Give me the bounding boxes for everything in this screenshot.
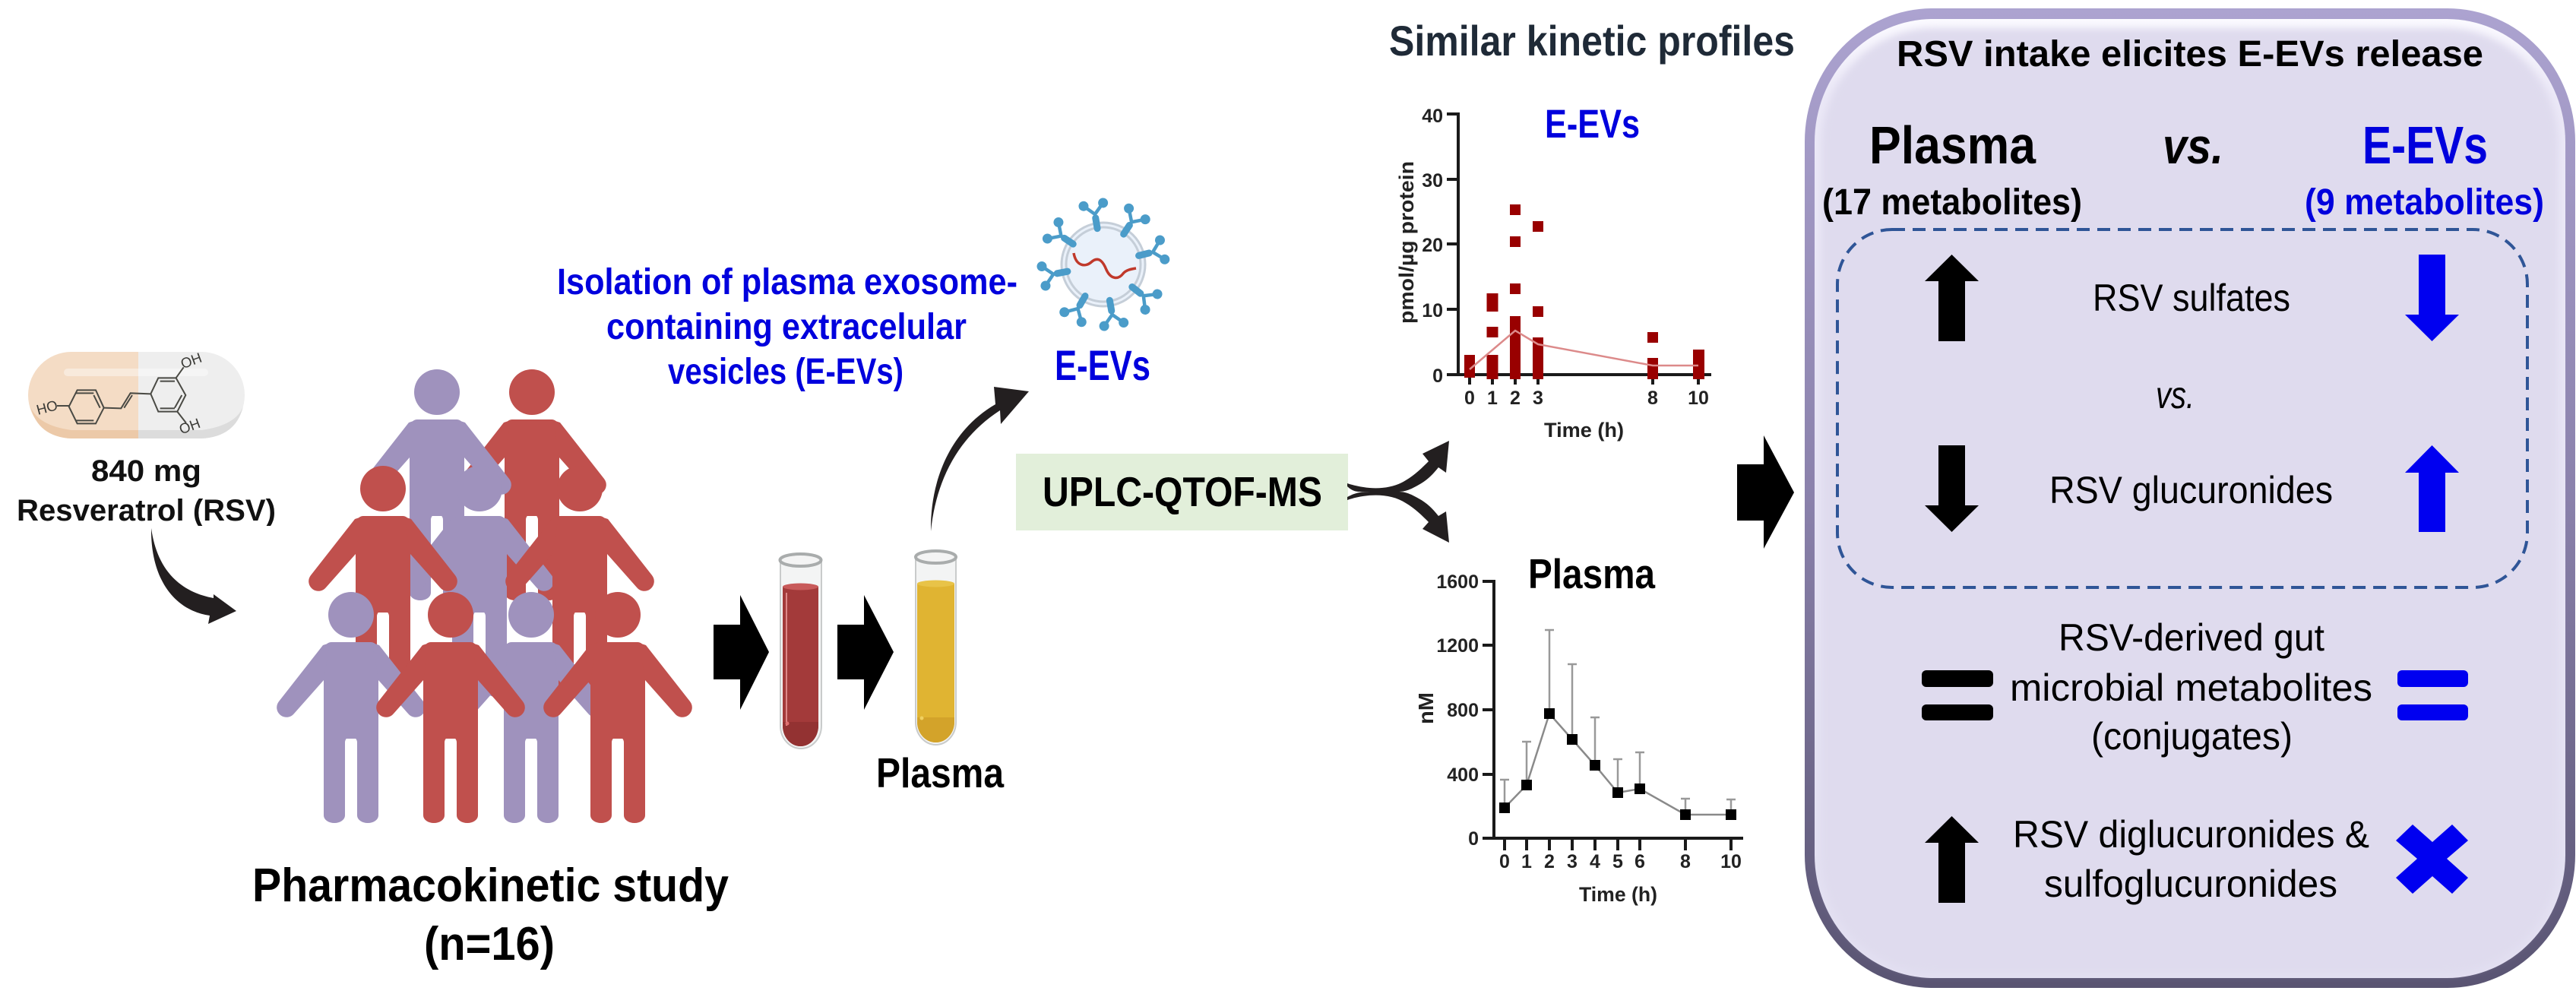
dose label: 840 mg (91, 454, 201, 488)
study label (252, 859, 729, 970)
chart: E-EVs kinetic scatter: 30 (1422, 170, 1443, 192)
icon: resveratrol capsule (28, 350, 245, 438)
label: gut microbial metabolites: RSV-derived gut (2059, 616, 2324, 659)
arrow: plasma diglucuronides up (1925, 816, 1979, 903)
chart: plasma kinetic curve: 3 (1567, 851, 1578, 872)
panel title: RSV intake elicites E-EVs release (1897, 34, 2483, 74)
icon: extracellular vesicle (1036, 197, 1171, 332)
chart: plasma kinetic curve: 800 (1447, 700, 1479, 721)
icon: plasma tube (916, 551, 956, 745)
label: gut microbial metabolites: (conjugates) (2091, 715, 2293, 758)
chart: E-EVs kinetic scatter: 0 (1432, 366, 1443, 387)
versus heading: vs. (2163, 118, 2223, 174)
label: RSV glucuronides: RSV glucuronides (2049, 469, 2333, 511)
heading: similar kinetic profiles: Similar kinetic profiles (1389, 17, 1795, 65)
column heading: plasma: (17 metabolites) (1822, 182, 2082, 223)
isolation text (557, 262, 1017, 392)
isolation text: vesicles (E-EVs) (668, 352, 903, 392)
chart: E-EVs kinetic scatter: 10 (1688, 388, 1709, 409)
arrow: capsule to subjects (151, 528, 236, 624)
label: RSV sulfates: RSV sulfates (2093, 277, 2290, 319)
chart: E-EVs kinetic scatter: 8 (1647, 388, 1658, 409)
dose label: Resveratrol (RSV) (17, 494, 276, 527)
chart: plasma kinetic curve: 6 (1635, 851, 1645, 872)
people group (277, 369, 692, 823)
chart: E-EVs kinetic scatter: 0 (1464, 388, 1475, 409)
chart: E-EVs kinetic scatter (1395, 102, 1711, 442)
arrow: blood to plasma (837, 595, 894, 710)
isolation text: Isolation of plasma exosome- (557, 262, 1017, 302)
icon: blood tube (780, 554, 821, 749)
chart: plasma kinetic curve: 5 (1612, 851, 1623, 872)
chart: plasma kinetic curve: 0 (1468, 828, 1479, 850)
arrow: plasma to E-EVs (931, 387, 1029, 531)
chart: plasma kinetic curve (1414, 550, 1743, 906)
icon: resveratrol capsule: HO (35, 397, 59, 418)
isolation text: containing extracelular (606, 307, 967, 347)
label: gut microbial metabolites: microbial metabolites (2010, 666, 2372, 709)
icon: resveratrol capsule: OH (179, 350, 204, 372)
chart: E-EVs kinetic scatter: 40 (1422, 106, 1443, 127)
arrow: charts to summary (1737, 435, 1794, 549)
chart: E-EVs kinetic scatter: 10 (1422, 300, 1443, 321)
chart: plasma kinetic curve: 10 (1720, 851, 1742, 872)
dose label (0, 454, 304, 537)
chart: E-EVs kinetic scatter: 20 (1422, 235, 1443, 256)
chart: plasma kinetic curve: 2 (1544, 851, 1555, 872)
chart: E-EVs kinetic scatter: 3 (1533, 388, 1543, 409)
chart title: Plasma: Plasma (1528, 550, 1655, 597)
chart: plasma kinetic curve: 1600 (1436, 571, 1479, 593)
chart: plasma kinetic curve: 1 (1521, 851, 1532, 872)
chart: plasma kinetic curve: 4 (1590, 851, 1600, 872)
icon: resveratrol capsule: OH (177, 415, 202, 437)
chart: E-EVs kinetic scatter: 1 (1487, 388, 1498, 409)
column heading: E-EVs (2305, 116, 2544, 223)
icon: E-EVs absent cross (2396, 825, 2468, 894)
chart: plasma kinetic curve: 8 (1680, 851, 1691, 872)
arrow: subjects to blood (714, 595, 769, 710)
plasma tube label: Plasma (876, 749, 1004, 796)
chart: E-EVs kinetic scatter: pmol/µg protein (1395, 161, 1418, 324)
label: vs.: vs. (2156, 374, 2195, 416)
column heading: E-EVs: E-EVs (2362, 116, 2488, 175)
chart: plasma kinetic curve: nM (1414, 692, 1438, 724)
arrow: plasma sulfates up (1925, 255, 1979, 341)
chart: plasma kinetic curve: Time (h) (1579, 883, 1657, 906)
chart: plasma kinetic curve: 0 (1499, 851, 1510, 872)
panel: summary (1805, 8, 2575, 988)
chart: E-EVs kinetic scatter: Time (h) (1544, 419, 1624, 442)
method box: UPLC-QTOF-MS (1043, 468, 1322, 515)
study label: (n=16) (424, 918, 555, 970)
label: diglucuronides and sulfoglucuronides: sulfoglucuronides (2044, 863, 2337, 905)
arrow: plasma glucuronides down (1925, 445, 1979, 532)
chart: plasma kinetic curve: 1200 (1436, 635, 1479, 657)
study label: Pharmacokinetic study (252, 859, 729, 912)
icon: plasma equal (1922, 670, 1993, 720)
chart title: E-EVs: E-EVs (1545, 102, 1640, 147)
arrow: E-EVs glucuronides up (2405, 445, 2459, 532)
icon: E-EVs equal (2397, 670, 2468, 720)
dashed box: sulfates vs glucuronides (1837, 230, 2527, 587)
column heading: E-EVs: (9 metabolites) (2305, 182, 2544, 223)
label: diglucuronides and sulfoglucuronides: RSV diglucuronides & (2013, 813, 2369, 856)
label: gut microbial metabolites (2010, 616, 2372, 758)
label: diglucuronides and sulfoglucuronides (2013, 813, 2369, 905)
column heading: plasma: Plasma (1869, 116, 2036, 175)
chart: plasma kinetic curve: 400 (1447, 764, 1479, 786)
E-EVs label: E-EVs (1055, 341, 1150, 389)
arrow: fork to charts (1347, 441, 1449, 543)
method box (1016, 454, 1348, 530)
arrow: E-EVs sulfates down (2405, 255, 2459, 341)
column heading: plasma (1822, 116, 2082, 223)
chart: E-EVs kinetic scatter: 2 (1510, 388, 1521, 409)
